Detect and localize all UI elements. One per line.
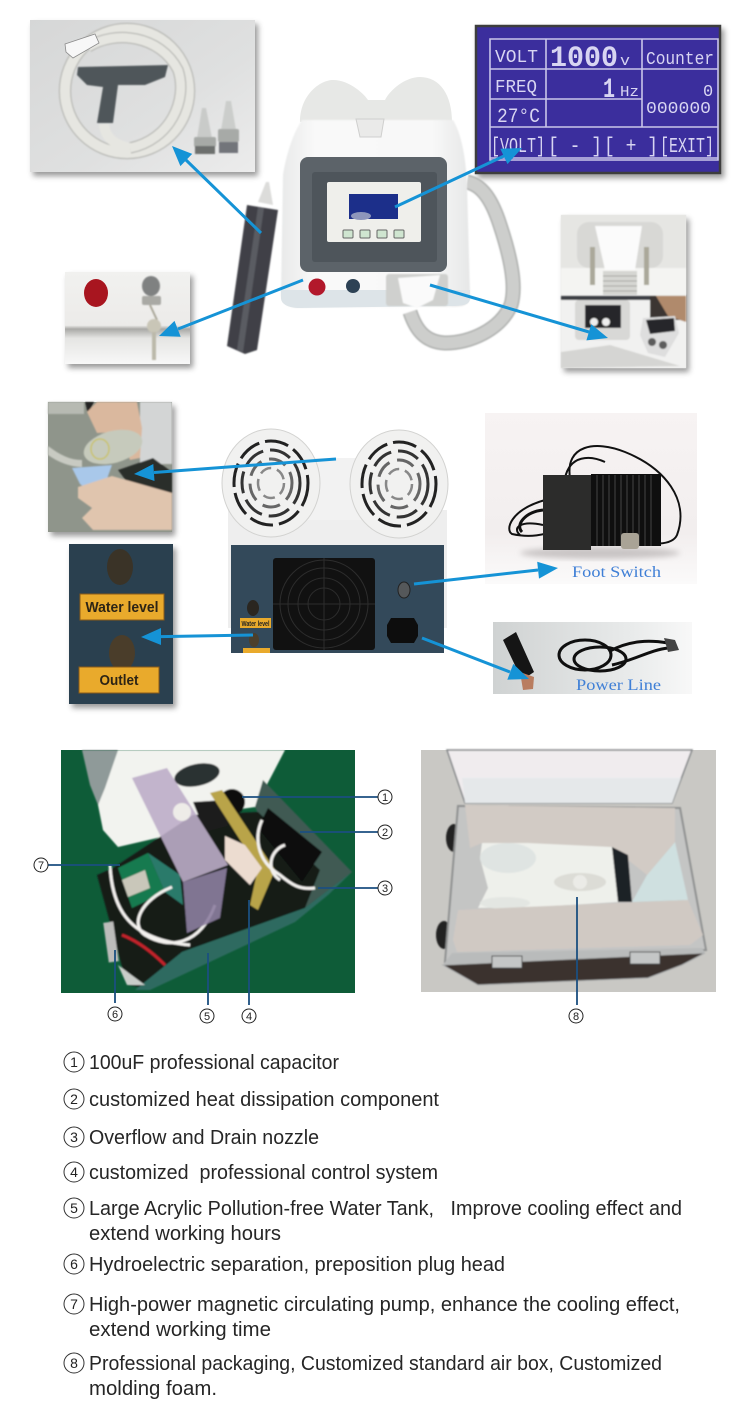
- item 8: 8: [70, 1355, 78, 1371]
- display text: [EXIT]: [660, 136, 714, 159]
- icon: coiled hose: [65, 29, 189, 153]
- panel: water level and outlet closeup: [69, 544, 173, 704]
- background light area: [140, 402, 172, 464]
- case wheels: [446, 824, 462, 852]
- marker 8: [569, 1009, 583, 1023]
- marker 5: 5: [204, 1011, 210, 1023]
- water level knob and label: [240, 600, 271, 653]
- cables: [509, 446, 680, 544]
- arrow: power socket to power line: [422, 638, 529, 680]
- chassis back wall: [255, 780, 352, 908]
- handle holder: [227, 182, 278, 354]
- domes: [300, 77, 452, 122]
- component box and capacitor: [193, 800, 228, 832]
- item 2: customized heat dissipation component: [89, 1089, 439, 1111]
- front socket: [386, 274, 448, 308]
- item 7: High-power magnetic circulating pump, enhance the cooling effect,: [89, 1294, 680, 1316]
- item 7: [64, 1294, 680, 1341]
- panel: hose and tips photo: [30, 20, 255, 172]
- arrow: socket to connector photo: [430, 285, 608, 340]
- rear cooling fan: [273, 558, 375, 650]
- marker 1: 1: [382, 792, 388, 804]
- label: water level: [80, 594, 164, 620]
- label: outlet: Outlet: [100, 673, 139, 689]
- panel buttons: [343, 230, 404, 238]
- front panel: [135, 872, 352, 990]
- bottle: [80, 424, 146, 470]
- panel: connector photos: [561, 215, 686, 368]
- case interior: [445, 806, 706, 962]
- photo: handpiece socket top: [561, 215, 686, 295]
- icon: metal tips: [194, 101, 239, 154]
- item 1: 100uF professional capacitor: [89, 1052, 339, 1074]
- display text: FREQ: [495, 78, 537, 98]
- handle recess: [172, 759, 222, 791]
- upper hand: [87, 402, 142, 460]
- icon: red emergency button: [84, 279, 108, 307]
- arrow: screen to LCD closeup: [395, 148, 522, 207]
- panel: pouring water photo: [48, 402, 172, 532]
- packed machine: [478, 843, 618, 908]
- white machine shell: [98, 750, 285, 847]
- item 5: 5: [70, 1200, 78, 1216]
- red wires and board: [122, 935, 165, 965]
- latches: [492, 956, 522, 968]
- panel: machine internals photo: [61, 750, 355, 993]
- marker 1: [378, 790, 392, 804]
- power socket: [387, 618, 418, 643]
- open lid: [447, 750, 692, 803]
- panel: power line photo: [493, 622, 692, 694]
- panel: foot switch photo: [485, 413, 697, 584]
- rear foam: [465, 805, 675, 875]
- marker 2: 2: [382, 827, 388, 839]
- item 1: 1: [70, 1054, 78, 1070]
- marker 4: [242, 1009, 256, 1023]
- item 4: 4: [70, 1164, 78, 1180]
- item 8: molding foam.: [89, 1378, 217, 1400]
- display text: VOLT: [495, 48, 538, 68]
- machine front view: [227, 77, 513, 354]
- item 5: [64, 1198, 682, 1245]
- marker 6: 6: [112, 1009, 118, 1021]
- marker 7: [34, 858, 48, 872]
- item 4: customized professional control system: [89, 1162, 438, 1184]
- label: outlet: [79, 667, 159, 693]
- arrow: refill port to water photo: [134, 459, 336, 481]
- panel: LCD display closeup: [476, 26, 720, 173]
- control board: [225, 836, 262, 885]
- marker 8: 8: [573, 1011, 579, 1023]
- item 7: 7: [70, 1296, 78, 1312]
- panel: key switch photo: [65, 272, 190, 364]
- display text: [ - ]: [548, 136, 602, 159]
- marker 2: [378, 825, 392, 839]
- small LCD: [349, 194, 398, 220]
- item 5: extend working hours: [89, 1223, 281, 1245]
- plug and cord: [559, 640, 668, 671]
- display text: 1: [603, 75, 615, 106]
- display text: 000000: [646, 100, 711, 119]
- display text: Counter: [646, 50, 714, 70]
- photo: connector port and plug: [561, 296, 686, 368]
- marker 4: 4: [246, 1011, 252, 1023]
- dark screen frame: [300, 157, 447, 272]
- case front: [443, 948, 705, 965]
- water tank: [132, 768, 228, 933]
- right fan: [350, 430, 448, 538]
- label: water level: Water level: [86, 600, 158, 616]
- body shell: [281, 120, 470, 308]
- lower hand: [78, 476, 172, 530]
- lower knob: [109, 635, 135, 671]
- item 8: [64, 1353, 662, 1400]
- display grid: [490, 39, 718, 160]
- display text: 1000: [550, 42, 618, 76]
- left fan: [222, 429, 320, 537]
- base band: [281, 290, 470, 308]
- panel: packaged machine photo: [421, 750, 716, 992]
- item 3: 3: [70, 1129, 78, 1145]
- soft shadow under pedal: [520, 547, 680, 559]
- numbered markers on photos: [34, 790, 583, 1023]
- water level knob and label: Water level: [242, 619, 270, 628]
- marker 5: [200, 1009, 214, 1023]
- marker 6: [108, 1007, 122, 1021]
- numbered component list: [64, 1052, 682, 1400]
- display text: Hz: [620, 84, 639, 101]
- item 6: 6: [70, 1256, 78, 1272]
- display text: [491, 42, 714, 159]
- arrow: stop button to key photo: [159, 280, 303, 337]
- heat sink: [258, 808, 322, 882]
- display text: 0: [703, 83, 713, 102]
- control panel of machine: [82, 750, 118, 805]
- display text: 27°C: [497, 106, 540, 129]
- arrow: outlet to closeup: [141, 628, 253, 645]
- item 5: Large Acrylic Pollution-free Water Tank, Improve cooling effect and: [89, 1198, 682, 1220]
- icon: T-shaped handle: [77, 65, 168, 123]
- item 2: 2: [70, 1091, 78, 1107]
- item 6: Hydroelectric separation, preposition plug head: [89, 1254, 505, 1276]
- arrow: handle to hose photo: [172, 146, 261, 233]
- display text: [VOLT]: [491, 136, 545, 159]
- red stop button: [308, 278, 326, 296]
- foot switch socket: [398, 582, 410, 598]
- item 3: Overflow and Drain nozzle: [89, 1127, 319, 1149]
- caption: Power Line: [576, 677, 661, 694]
- marker 7: 7: [38, 860, 44, 872]
- icon: key lock: [142, 276, 161, 360]
- handle clip: [356, 119, 384, 137]
- leader lines on photos: [48, 797, 577, 1005]
- hose of machine: [410, 182, 513, 343]
- front foam: [453, 900, 703, 952]
- body rear shell: [228, 510, 447, 628]
- white control panel: [327, 182, 421, 242]
- item 8: Professional packaging, Customized standard air box, Customized: [89, 1353, 662, 1375]
- power knob: [346, 279, 360, 293]
- upper knob: [107, 549, 133, 585]
- icon: handpiece head: [65, 34, 99, 58]
- tubes: [110, 820, 315, 945]
- blue funnel: [72, 465, 112, 492]
- marker 3: 3: [382, 883, 388, 895]
- green pump: [118, 853, 165, 908]
- marker 3: [378, 881, 392, 895]
- item 7: extend working time: [89, 1319, 271, 1341]
- chassis interior: [97, 812, 320, 988]
- rear plate: [231, 545, 444, 653]
- machine rear view: [222, 429, 448, 653]
- display text: [ + ]: [604, 136, 658, 159]
- pedal: [543, 474, 661, 550]
- caption: Foot Switch: [572, 564, 661, 581]
- yellow bracket: [210, 790, 275, 910]
- arrow: socket to foot switch: [414, 562, 558, 584]
- display text: v: [620, 53, 630, 70]
